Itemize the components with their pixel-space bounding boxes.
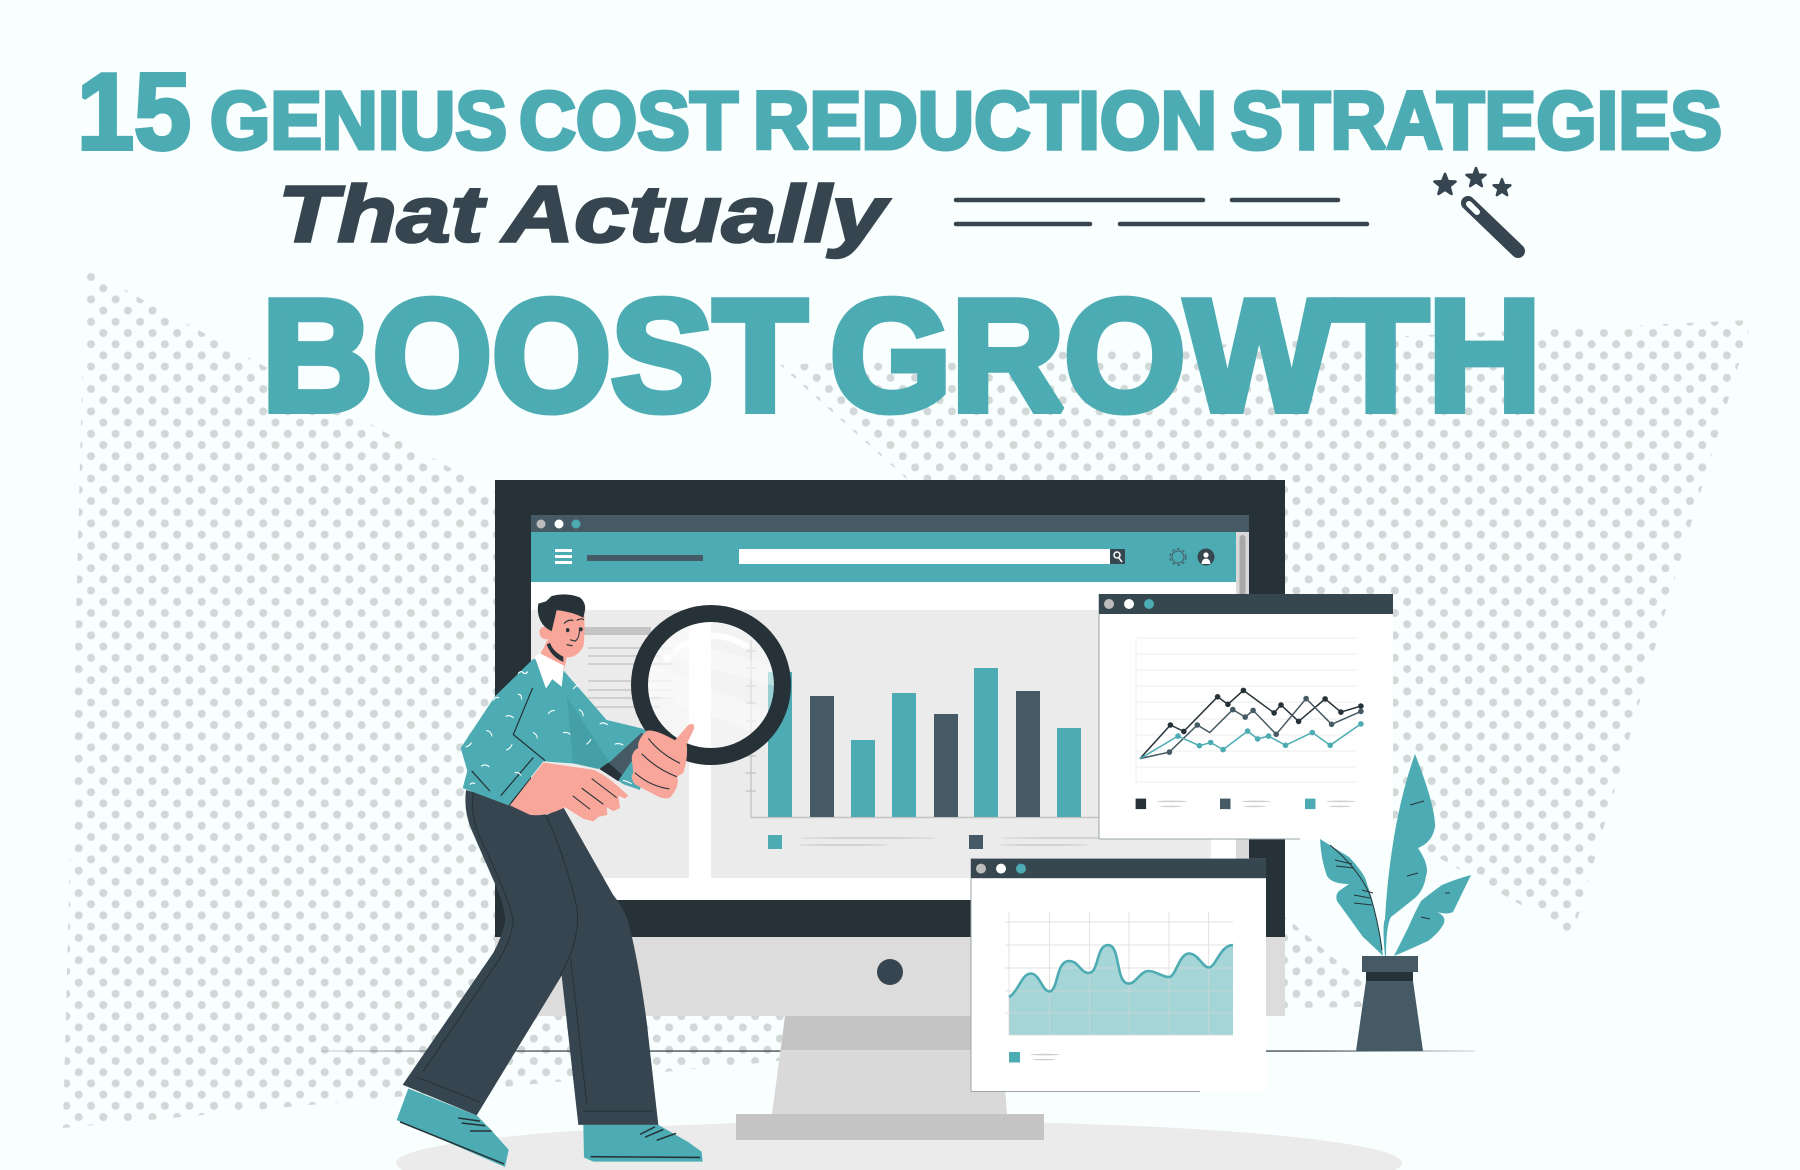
- subtitle: that actually: Actually: [501, 170, 890, 258]
- dotted background shape: [63, 268, 1752, 1128]
- monitor chin: [495, 937, 1285, 1016]
- title: 15 genius cost reduction strategies: STRATEGIES: [1231, 76, 1722, 166]
- icon: magic wand with stars: [1435, 168, 1518, 251]
- back shoe: [397, 1089, 509, 1167]
- subtitle: that actually: [278, 170, 890, 258]
- plant in pot: [1320, 754, 1471, 1051]
- headline: boost growth: [262, 268, 1541, 444]
- headline: boost growth: GROWTH: [830, 268, 1541, 444]
- floor shadow: [396, 1121, 1402, 1170]
- title: 15 genius cost reduction strategies: REDUCTION: [753, 76, 1217, 166]
- title: 15 genius cost reduction strategies: 15: [77, 51, 191, 173]
- shirt collar: [535, 653, 564, 689]
- magnifier handle: [608, 733, 647, 776]
- browser title bar: [531, 515, 1249, 532]
- scrollbar: [1236, 532, 1249, 900]
- series: slate line: [1140, 696, 1364, 759]
- computer monitor: [495, 480, 1285, 1140]
- sweater: [461, 659, 650, 805]
- monitor base: [736, 1114, 1044, 1140]
- series: teal line: [1140, 721, 1364, 759]
- face: [539, 606, 585, 657]
- floor line: [321, 1050, 1475, 1052]
- title: 15 genius cost reduction strategies: [77, 51, 1722, 173]
- window: area chart: [971, 859, 1266, 1092]
- power button: [877, 959, 903, 985]
- title: 15 genius cost reduction strategies: GENIUS: [210, 76, 507, 166]
- series: dark line: [1140, 688, 1364, 759]
- hair: [538, 594, 585, 631]
- near hand: [510, 762, 628, 821]
- area chart legend: [1009, 1052, 1060, 1062]
- left text panel: [531, 610, 689, 878]
- headline: boost growth: BOOST: [262, 268, 807, 444]
- decorative text lines: [956, 200, 1367, 224]
- magnifying glass: [640, 614, 790, 756]
- title: 15 genius cost reduction strategies: COST: [519, 76, 738, 166]
- bar chart: [746, 640, 1212, 818]
- right chart panel: [711, 610, 1211, 878]
- neck: [539, 635, 567, 670]
- far hand: [632, 724, 694, 798]
- facial features: [564, 619, 584, 646]
- character with magnifying glass: [397, 594, 790, 1167]
- trousers: [403, 790, 658, 1125]
- browser toolbar: [531, 532, 1236, 582]
- monitor bezel: [495, 480, 1285, 937]
- screen: [531, 532, 1249, 900]
- front shoe: [583, 1125, 703, 1162]
- line chart legend: [1136, 799, 1356, 809]
- bar chart legend: [768, 835, 1138, 849]
- subtitle: that actually: That: [278, 170, 487, 258]
- window: line chart: [1099, 594, 1393, 839]
- monitor stand: [772, 1016, 1007, 1114]
